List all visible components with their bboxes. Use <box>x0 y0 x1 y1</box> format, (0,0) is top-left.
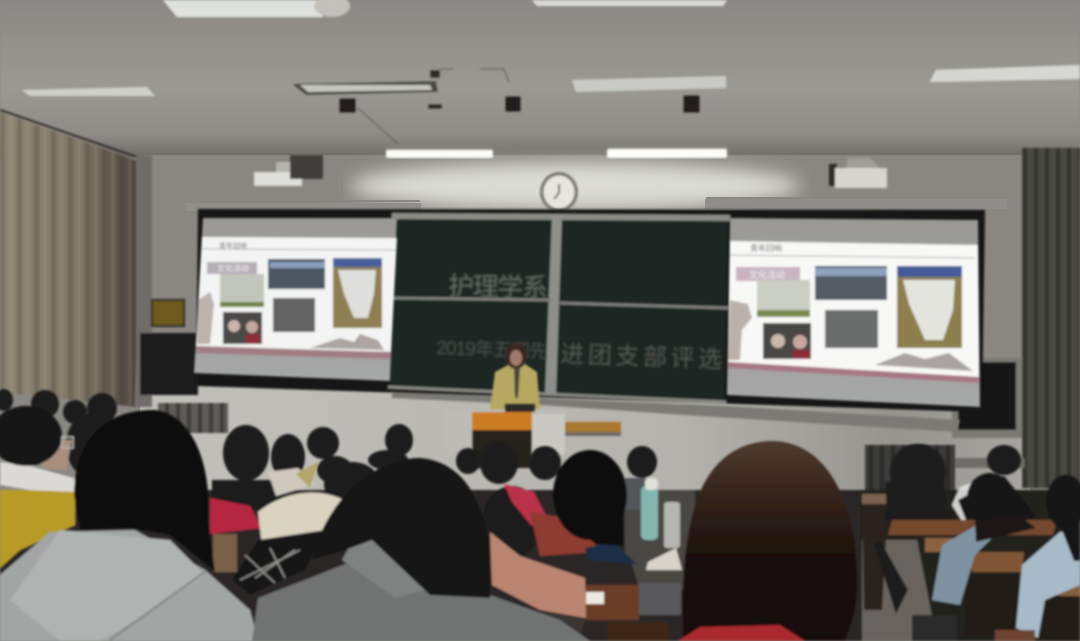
long black hair <box>74 410 215 572</box>
audience <box>0 389 1080 641</box>
student: gray hoodie <box>0 530 258 641</box>
desks <box>530 494 1080 641</box>
blackboard <box>196 209 985 432</box>
left screen <box>194 218 397 381</box>
lectern <box>445 404 621 468</box>
student: right blue jacket <box>1016 530 1080 638</box>
presenter <box>490 343 540 410</box>
student: brown hair foreground <box>683 441 857 641</box>
slide photos <box>728 266 973 371</box>
slide photos: 文化活动 <box>749 269 785 280</box>
left curtain <box>0 110 228 433</box>
slide photos: 文化活动 <box>217 263 249 273</box>
back row heads <box>0 389 1021 558</box>
right screen: 青年回响 <box>750 243 782 253</box>
upper wall <box>140 155 1030 395</box>
chalk writing <box>436 271 723 374</box>
right curtain <box>952 148 1080 488</box>
fluorescent tube lights <box>386 144 727 158</box>
ceiling lights <box>22 0 1080 96</box>
chalk writing: 2019年五四先 <box>436 337 549 363</box>
left screen: 青年回响 <box>219 241 247 250</box>
student: salmon top <box>490 532 586 618</box>
lower wall <box>140 385 1030 555</box>
projectors and clock <box>254 155 887 212</box>
student: gray fleece <box>252 560 590 641</box>
hanging cameras <box>339 95 700 113</box>
ceiling <box>0 0 1080 158</box>
icon: wall clock <box>540 172 578 212</box>
right screen <box>727 218 980 407</box>
bottles <box>641 478 680 548</box>
student: red hooded, black hair <box>530 512 600 556</box>
slide photos <box>197 258 384 350</box>
chalk writing: 进团支部评选 <box>560 341 723 374</box>
radiators <box>865 445 1025 495</box>
seated students near <box>0 406 1080 641</box>
chalk writing: 护理学系 <box>448 271 548 303</box>
student: yellow jacket <box>0 490 75 568</box>
student: white hood, patterned jacket <box>258 493 354 546</box>
